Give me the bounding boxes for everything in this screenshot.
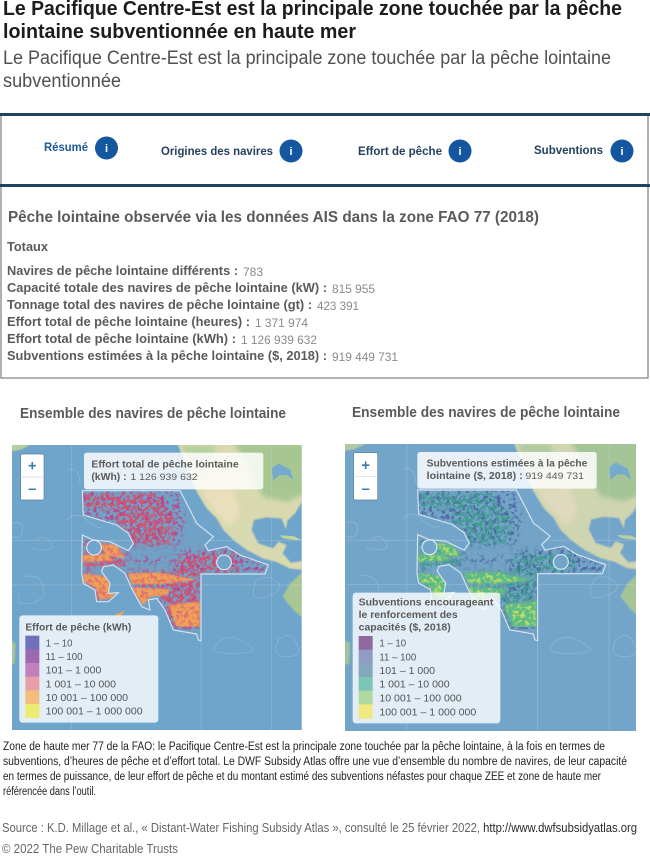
- legend: subsidies: [353, 593, 500, 723]
- caption: référencée dans l’outil.: [3, 786, 96, 798]
- zoom control: –: [28, 481, 36, 497]
- navigation tab: Origines des navires: i: [289, 146, 293, 158]
- panel heading: Pêche lointaine observée via les données AIS dans la zone FAO 77 (2018): [8, 209, 539, 226]
- legend: fishing effort: [19, 615, 158, 723]
- legend: subsidies: Subventions encourageant: [359, 598, 494, 609]
- legend: subsidies: le renforcement des: [359, 610, 458, 621]
- title: [3, 0, 622, 43]
- totals list: 1 126 939 632: [241, 335, 317, 347]
- totals list: Tonnage total des navires de pêche lointaine (gt) :: [7, 297, 312, 312]
- totals list: Subventions estimées à la pêche lointaine ($, 2018) :: [7, 348, 327, 363]
- left map heading: Ensemble des navires de pêche lointaine: [20, 406, 286, 422]
- totals list: Effort total de pêche lointaine (heures) :: [7, 314, 250, 329]
- legend: subsidies: 10 001 – 100 000: [379, 693, 462, 704]
- navigation tab: Effort de pêche: i: [458, 146, 462, 158]
- subsidies heat layer: [417, 490, 606, 641]
- source line: Source : K.D. Millage et al., « Distant-Water Fishing Subsidy Atlas », consulté le 25 février 2022, http://www.dwfsubsidyatlas.org: [2, 821, 637, 835]
- legend: fishing effort: 100 001 – 1 000 000: [46, 707, 143, 718]
- legend: subsidies: capacités ($, 2018): [359, 622, 451, 633]
- info box: total effort: 1 126 939 632: [130, 472, 198, 482]
- totals heading: Totaux: [7, 239, 49, 254]
- totals list: 783: [243, 267, 263, 279]
- info box: estimated subsidies: 919 449 731: [525, 471, 584, 481]
- totals list: Capacité totale des navires de pêche lointaine (kW) :: [7, 280, 327, 295]
- legend: subsidies: 11 – 100: [379, 652, 416, 663]
- map: subsidies: [345, 444, 636, 731]
- legend: subsidies: 1 001 – 10 000: [379, 680, 450, 691]
- totals list: 423 391: [317, 301, 359, 313]
- navigation tab: Résumé: i: [105, 143, 108, 155]
- legend: subsidies: 100 001 – 1 000 000: [379, 707, 476, 718]
- zoom control: [21, 454, 44, 500]
- navigation tab: Subventions: [534, 140, 634, 162]
- subtitle: Le Pacifique Centre-Est est la principale zone touchée par la pêche lointaine: [3, 48, 611, 69]
- navigation tab: Résumé: [44, 136, 118, 160]
- legend: subsidies: 101 – 1 000: [379, 666, 435, 677]
- caption: [3, 741, 627, 798]
- navigation tab: Subventions: Subventions: [534, 143, 603, 157]
- legend: fishing effort: 11 – 100: [46, 652, 83, 663]
- totals list: Navires de pêche lointaine différents :: [7, 263, 238, 278]
- info box: estimated subsidies: [417, 452, 597, 489]
- legend: fishing effort: 10 001 – 100 000: [46, 693, 128, 704]
- zoom control: +: [361, 458, 370, 474]
- right map heading: Ensemble des navires de pêche lointaine: [352, 405, 620, 421]
- map: fishing effort: [12, 445, 302, 730]
- info box: total effort: [84, 453, 263, 489]
- navigation tab: Origines des navires: [161, 140, 302, 162]
- legend: fishing effort: 1 – 10: [46, 638, 73, 649]
- totals list: 815 955: [332, 284, 375, 296]
- subtitle: [3, 48, 611, 92]
- info box: total effort: (kWh) :: [91, 472, 127, 483]
- navigation tab: Résumé: Résumé: [44, 140, 88, 154]
- legend: subsidies: 1 – 10: [379, 639, 406, 650]
- zoom control: –: [362, 481, 370, 497]
- zoom control: +: [28, 459, 37, 475]
- legend: fishing effort: 1 001 – 10 000: [46, 679, 116, 690]
- totals list: Effort total de pêche lointaine (kWh) :: [7, 331, 236, 346]
- legend: fishing effort: 101 – 1 000: [46, 666, 101, 677]
- navigation tab: Effort de pêche: Effort de pêche: [358, 144, 442, 158]
- navigation tab: Origines des navires: Origines des navires: [161, 144, 273, 158]
- zoom control: [354, 453, 378, 500]
- info box: estimated subsidies: Subventions estimées à la pêche: [427, 458, 588, 469]
- fishing effort heat layer: [82, 491, 268, 641]
- totals list: 919 449 731: [332, 352, 398, 364]
- panel: summary frame: [0, 113, 650, 378]
- navigation tab: Subventions: i: [620, 146, 624, 158]
- legend: fishing effort: Effort de pêche (kWh): [25, 623, 131, 634]
- subtitle: subventionnée: [3, 71, 121, 92]
- navigation tab: Effort de pêche: [358, 140, 472, 162]
- info box: total effort: Effort total de pêche lointaine: [91, 460, 239, 471]
- title: lointaine subventionnée en haute mer: [3, 21, 356, 43]
- totals list: [7, 263, 398, 364]
- totals list: 1 371 974: [255, 318, 309, 330]
- info box: estimated subsidies: lointaine ($, 2018) :: [427, 471, 523, 482]
- copyright: © 2022 The Pew Charitable Trusts: [2, 842, 178, 856]
